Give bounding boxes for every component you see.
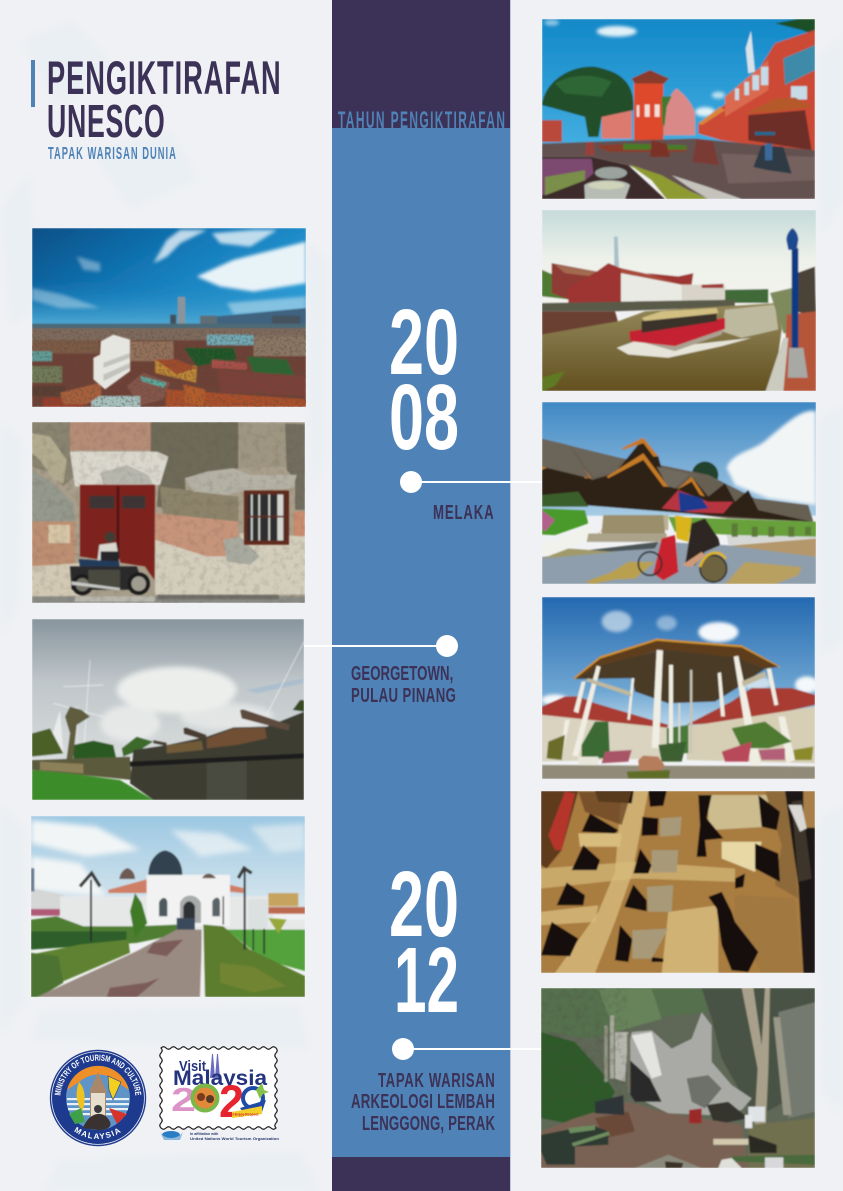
stamp border — [160, 1047, 277, 1129]
photo: Melaka Stadthuys square — [542, 19, 815, 199]
white tower block — [93, 335, 130, 389]
photo: Georgetown skyline — [32, 228, 306, 407]
column blue body — [332, 128, 510, 1157]
marker: Georgetown — [304, 635, 458, 707]
year 2008: 08 — [389, 365, 459, 469]
door, window and motorcycle — [70, 485, 289, 595]
year 2012: 12 — [394, 928, 459, 1032]
label: Georgetown, Pulau Pinang: PULAU PINANG — [351, 684, 456, 707]
UNWTO emblem — [162, 1131, 180, 1139]
column bottom purple band — [332, 1157, 510, 1191]
affiliation note: United Nations World Tourism Organization — [190, 1137, 279, 1141]
logo: Visit Malaysia 2020 — [160, 1047, 279, 1141]
marker: Lenggong — [351, 1038, 542, 1135]
label: Lembah Lenggong: TAPAK WARISAN — [378, 1069, 495, 1092]
2020 numerals — [171, 1076, 269, 1127]
tagline: Travel·Enjoy·Respect — [224, 1112, 259, 1116]
photo: archaeological excavation — [541, 791, 815, 973]
photo: Lenggong cave site — [541, 988, 815, 1168]
seal inner scene — [66, 1066, 130, 1130]
subtitle: TAPAK WARISAN DUNIA — [48, 144, 176, 164]
logo: Ministry of Tourism and Culture — [50, 1050, 146, 1146]
label: Lembah Lenggong: LENGGONG, PERAK — [362, 1112, 496, 1135]
wall texture — [32, 422, 305, 603]
photo: Kapitan Keling mosque — [31, 816, 305, 997]
year 2012: 20 — [389, 852, 459, 956]
year 2012 — [389, 852, 459, 1032]
title accent bar — [31, 60, 35, 107]
title line 2: UNESCO — [47, 95, 165, 147]
label: Lembah Lenggong — [351, 1069, 496, 1135]
central timeline column — [332, 0, 511, 1191]
foliage texture — [541, 988, 628, 1101]
label: Lembah Lenggong: ARKEOLOGI LEMBAH — [351, 1090, 495, 1113]
column right edge — [510, 0, 511, 1191]
label: Georgetown, Pulau Pinang — [351, 662, 456, 707]
photo: pavilion museum — [542, 597, 815, 779]
logo: Visit Malaysia 2020: Malaysia — [173, 1067, 267, 1090]
column top purple band — [332, 0, 510, 128]
city texture — [32, 330, 306, 407]
column heading: TAHUN PENGIKTIRAFAN — [338, 108, 505, 134]
label: Melaka: MELAKA — [433, 501, 494, 524]
title block — [31, 52, 281, 164]
seal curved text: MINISTRY OF TOURISM AND CULTURE — [54, 1054, 142, 1096]
year 2008: 20 — [389, 290, 459, 394]
2020 numerals: 2 — [171, 1081, 196, 1118]
marker: Melaka — [400, 471, 542, 524]
photo: Melaka river cruise — [542, 210, 816, 391]
photo: Fort Cornwallis — [32, 619, 304, 800]
affiliation note: In affiliation with — [190, 1132, 218, 1136]
twin towers — [210, 1054, 220, 1078]
year 2008 — [389, 290, 459, 469]
wordmark: Visit — [179, 1058, 206, 1075]
logo: Ministry of Tourism and Culture: MALAYSIA — [74, 1126, 121, 1139]
photo: Melaka sultanate palace — [542, 402, 816, 584]
seal outer ring — [52, 1052, 144, 1144]
title line 1: PENGIKTIRAFAN — [47, 52, 281, 105]
2020 numerals: 2 — [219, 1076, 244, 1127]
photo: street art wall — [32, 422, 305, 603]
label: Georgetown, Pulau Pinang: GEORGETOWN, — [351, 662, 453, 685]
